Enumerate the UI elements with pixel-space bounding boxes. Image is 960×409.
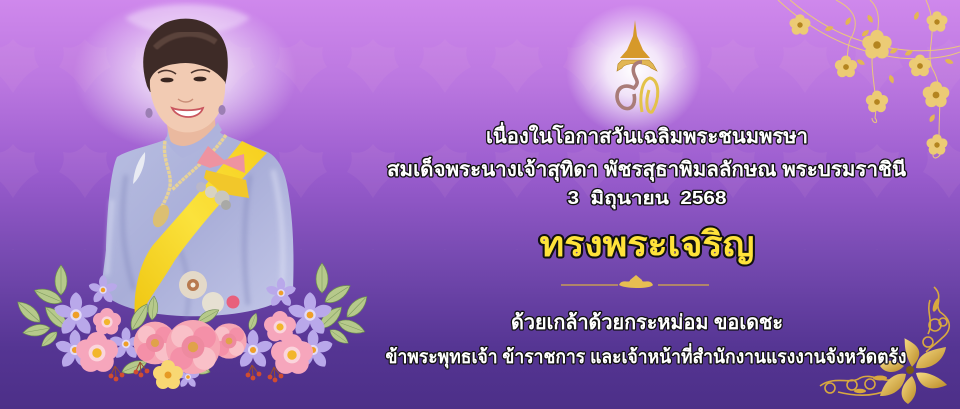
heading line 1: เนื่องในโอกาสวันเฉลิมพระชนมพรษา [486, 121, 808, 148]
pink bow [197, 146, 245, 173]
royal cypher emblem [617, 20, 658, 112]
portrait halo [73, 0, 297, 153]
sleeve shading [107, 170, 283, 318]
gold blossoms [790, 11, 949, 155]
yellow sash [135, 141, 267, 318]
eyes [160, 77, 206, 82]
berries [109, 362, 283, 382]
gold leaves [824, 11, 954, 123]
eyebrows [158, 70, 210, 74]
rosebud [226, 296, 240, 308]
medals [196, 182, 231, 210]
face [150, 63, 225, 132]
portrait of the Queen [102, 19, 293, 318]
bottom-right gold flower ornament [820, 287, 949, 404]
star decoration [179, 271, 207, 299]
organisation line: ข้าพระพุทธเจ้า ข้าราชการ และเจ้าหน้าที่สำนักงานแรงงานจังหวัดตรัง [386, 343, 906, 369]
earrings [145, 105, 226, 118]
nose [178, 99, 193, 102]
heading line 2: สมเด็จพระนางเจ้าสุทิดา พัชรสุธาพิมลลักษณ พระบรมราชินี [387, 156, 906, 182]
roses [134, 320, 247, 374]
letter so [617, 62, 642, 109]
hair highlight [155, 34, 216, 48]
date: 3 มิถุนายน 2568 [568, 188, 726, 210]
dress [102, 126, 293, 316]
dedication line: ด้วยเกล้าด้วยกระหม่อม ขอเดชะ [511, 311, 783, 334]
necklace [158, 135, 226, 216]
pink flowers [76, 308, 313, 374]
roof wings [617, 60, 657, 71]
smile [172, 108, 203, 117]
leaves [14, 263, 371, 378]
gold divider [561, 275, 709, 288]
collar [165, 122, 222, 158]
royal emblem glow [566, 4, 702, 136]
neck [165, 105, 216, 156]
second star decoration [202, 292, 224, 314]
title: ทรงพระเจริญ [540, 225, 754, 265]
hair [143, 19, 228, 92]
yellow flower [153, 360, 183, 389]
letter tho [641, 78, 658, 112]
medal ribbons [204, 170, 249, 198]
top-right gold vines [778, 0, 960, 158]
brooch [133, 152, 145, 184]
necklace pendant [150, 202, 172, 230]
purple flowers [52, 275, 334, 389]
floral arrangement [14, 263, 371, 389]
spire [620, 20, 650, 58]
background lotus pattern [0, 0, 960, 250]
